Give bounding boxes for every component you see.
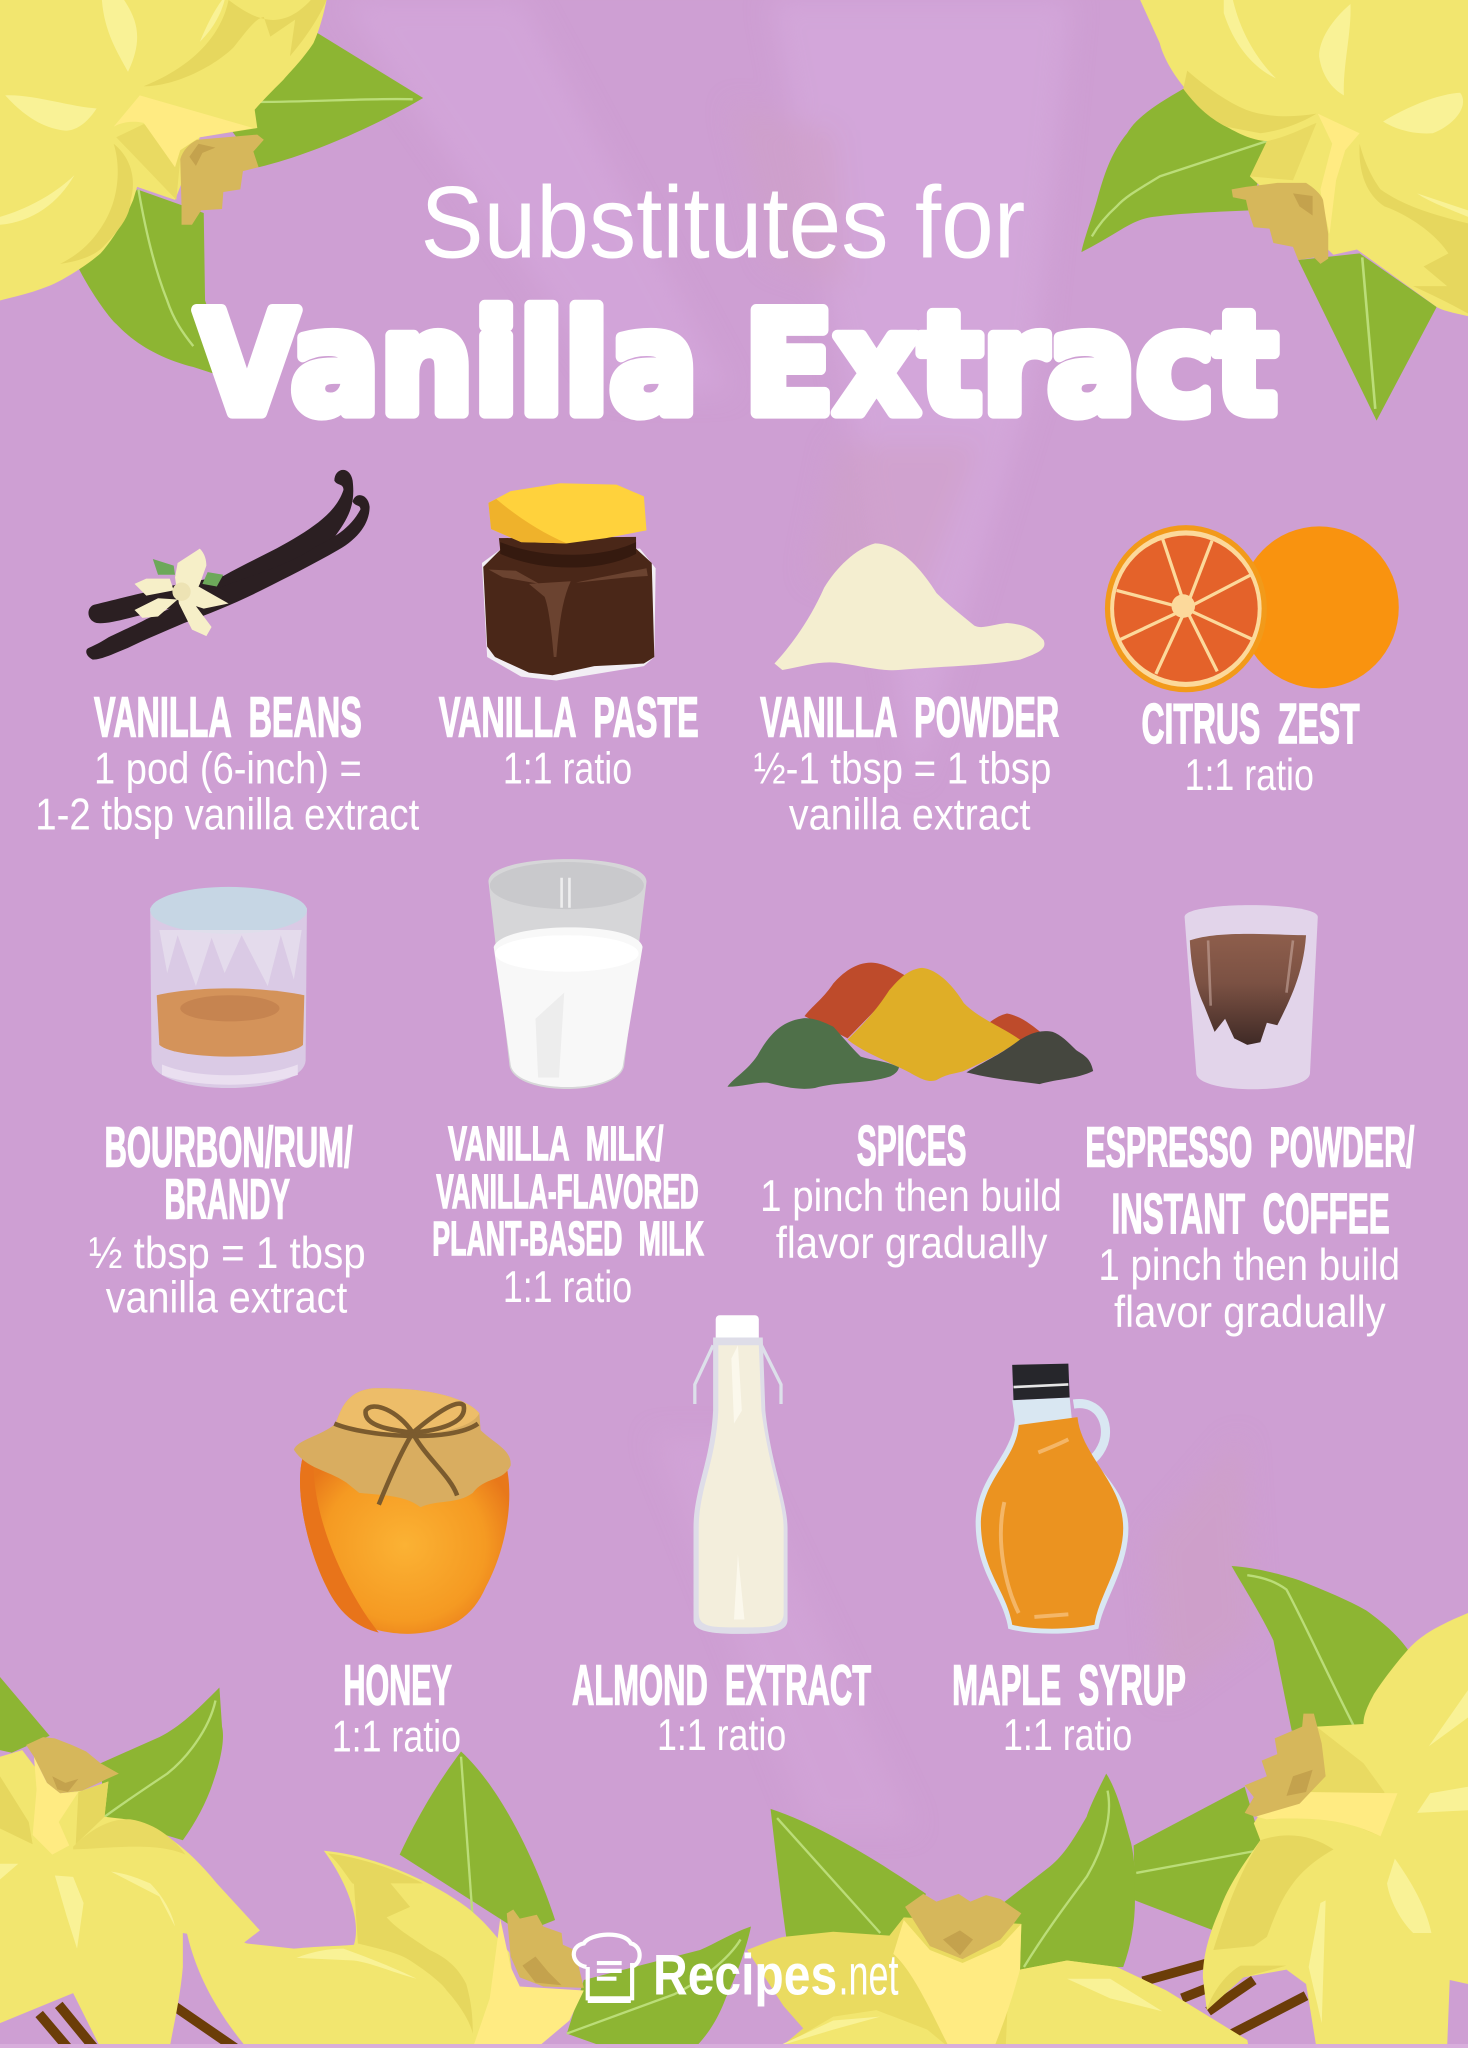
- top-right vanilla flower with leaves: [1081, 0, 1468, 421]
- centre flower: [747, 1917, 1249, 2048]
- top-left vanilla flower with leaves: [0, 0, 423, 380]
- icon: jar of vanilla paste: [482, 483, 656, 681]
- title line: Substitutes for: Substitutes for: [421, 165, 1025, 279]
- item: vanilla milk: [432, 859, 704, 1312]
- title line: Vanilla Extract: Vanilla Extract: [196, 283, 1277, 447]
- amount line 2: vanilla powder: vanilla extract: [789, 790, 1031, 839]
- label: vanilla powder: VANILLA POWDER: [760, 686, 1059, 749]
- icon: vanilla beans: [86, 470, 370, 660]
- amount: citrus zest: 1:1 ratio: [1185, 751, 1314, 800]
- far-left flower: [0, 1750, 260, 2048]
- icon: vanilla powder pile: [774, 543, 1044, 670]
- item: spices: [727, 963, 1093, 1268]
- icon: orange and slice: [1105, 525, 1399, 692]
- label: brandy: BRANDY: [165, 1168, 290, 1231]
- amount line 2: vanilla beans: 1-2 tbsp vanilla extract: [35, 790, 420, 839]
- label: vanilla milk: VANILLA MILK/: [448, 1117, 663, 1171]
- wordmark: Recipes: Recipes: [653, 1943, 837, 2007]
- icon: glass of bourbon: [150, 887, 307, 1088]
- label: honey: HONEY: [343, 1653, 452, 1716]
- icon: almond extract bottle: [694, 1315, 788, 1634]
- amount: spices: 1 pinch then build: [760, 1172, 1062, 1221]
- bottom vanilla flowers and leaves: [0, 1566, 1468, 2048]
- second flower: [185, 1851, 522, 2048]
- amount: vanilla beans: 1 pod (6-inch) =: [94, 745, 362, 794]
- label: almond extract: ALMOND EXTRACT: [572, 1653, 871, 1716]
- amount: vanilla milk: 1:1 ratio: [503, 1263, 632, 1312]
- wordmark: .net: .net: [838, 1943, 899, 2007]
- icon: glass of espresso: [1185, 905, 1318, 1089]
- leaves: [0, 1566, 1408, 2048]
- amount: espresso: 1 pinch then build: [1098, 1241, 1400, 1290]
- amount: almond extract: 1:1 ratio: [657, 1711, 786, 1760]
- item: vanilla beans: [35, 470, 420, 839]
- amount: maple syrup: 1:1 ratio: [1003, 1711, 1132, 1760]
- label: plant-based milk: PLANT-BASED MILK: [432, 1212, 704, 1266]
- item: espresso powder: [1085, 905, 1415, 1337]
- title: [196, 165, 1277, 447]
- item: almond extract: [572, 1315, 871, 1760]
- item: vanilla paste: [439, 483, 699, 794]
- icon: chef hat and notebook: [574, 1935, 640, 2001]
- right flower: [1203, 1613, 1468, 2048]
- label: vanilla paste: VANILLA PASTE: [439, 686, 699, 749]
- amount: honey: 1:1 ratio: [332, 1712, 461, 1761]
- label: maple syrup: MAPLE SYRUP: [952, 1653, 1186, 1716]
- amount line 2: espresso: flavor gradually: [1114, 1288, 1386, 1337]
- icon: glass of milk: [488, 859, 646, 1089]
- label: vanilla beans: VANILLA BEANS: [94, 686, 362, 749]
- item: maple syrup: [952, 1364, 1186, 1760]
- icon: honey pot: [294, 1388, 511, 1634]
- item: bourbon rum brandy: [89, 887, 366, 1323]
- icon: spice piles: [727, 963, 1093, 1089]
- label: vanilla flavored: VANILLA-FLAVORED: [436, 1165, 699, 1219]
- brown stems: [39, 1963, 1306, 2048]
- amount line 2: spices: flavor gradually: [776, 1219, 1048, 1268]
- amount line 2: bourbon: vanilla extract: [106, 1274, 348, 1323]
- label: bourbon rum: BOURBON/RUM/: [104, 1115, 353, 1178]
- logo: Recipes.net: [574, 1935, 899, 2007]
- item: vanilla powder: [754, 543, 1059, 839]
- item: honey: [294, 1388, 511, 1761]
- label: spices: SPICES: [857, 1114, 966, 1177]
- item: citrus zest: [1105, 525, 1399, 800]
- amount: vanilla paste: 1:1 ratio: [503, 745, 632, 794]
- icon: maple syrup bottle: [976, 1364, 1128, 1634]
- amount: bourbon: ½ tbsp = 1 tbsp: [89, 1229, 366, 1278]
- amount: vanilla powder: ½-1 tbsp = 1 tbsp: [754, 745, 1051, 794]
